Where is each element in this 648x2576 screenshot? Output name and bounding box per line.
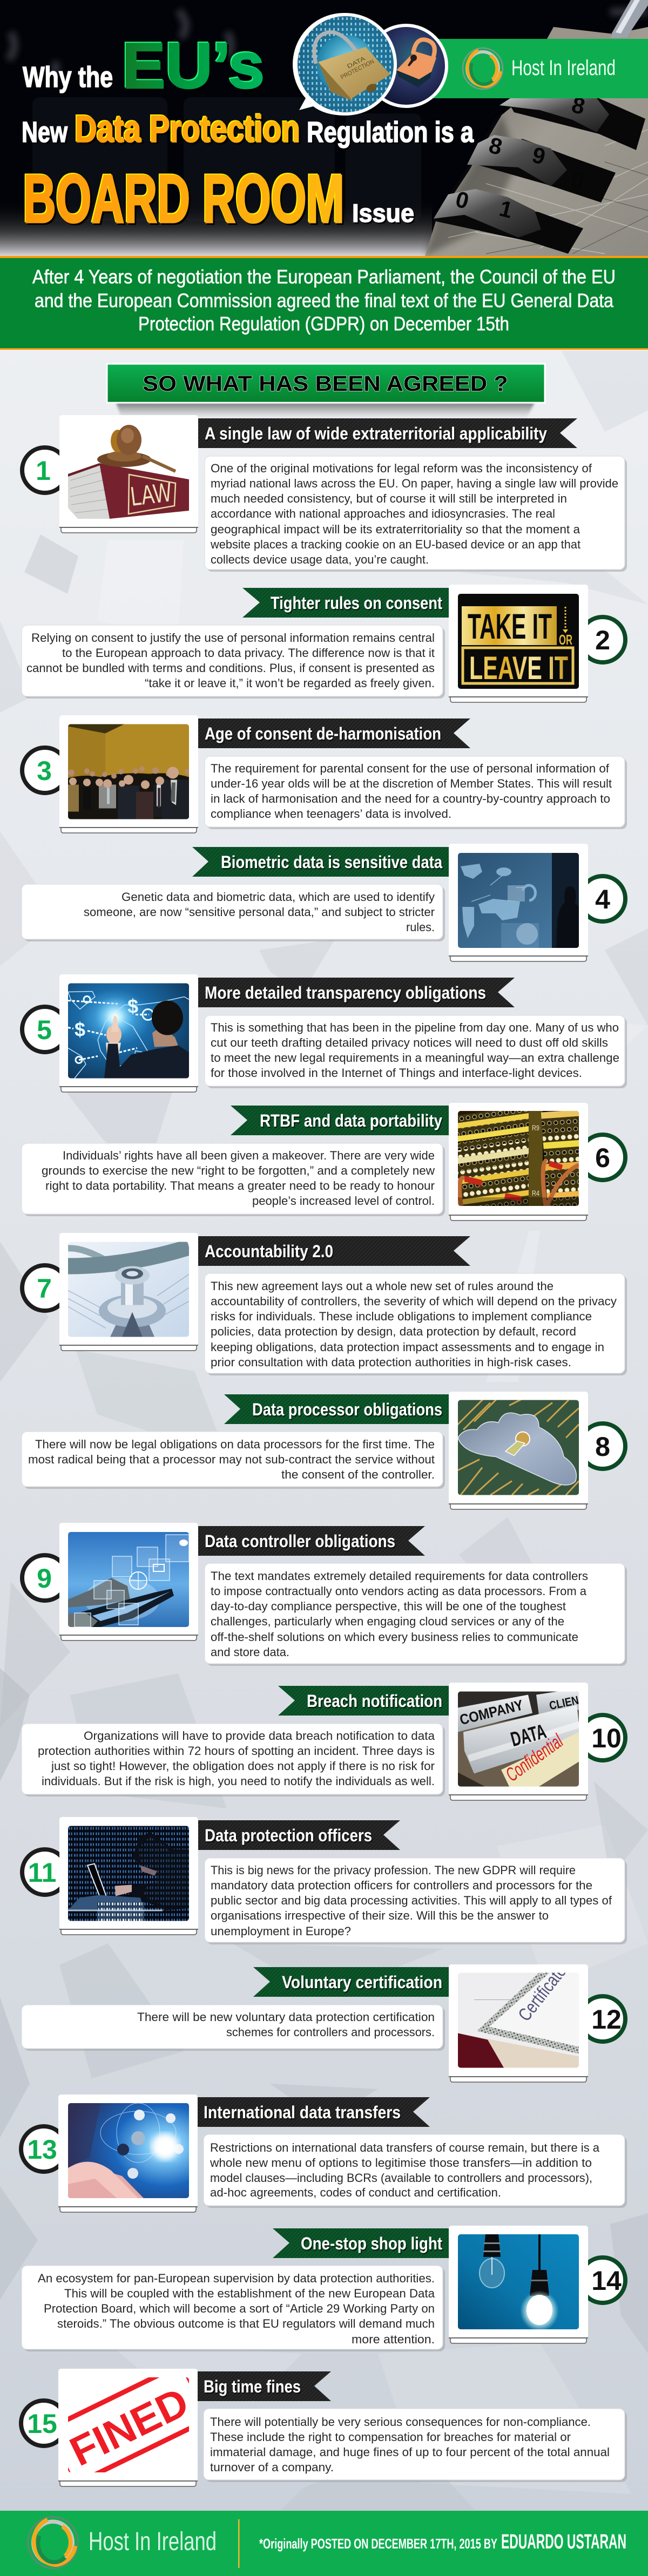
number badge 6 — [580, 1135, 625, 1180]
photo card: fined stamp: FINED — [63, 2379, 195, 2475]
text block: cut our teeth drafting detailed privacy notices will need to dust off old skills — [211, 1036, 608, 1049]
panel: item 7 accountability — [22, 1233, 627, 1375]
text block: Individuals’ rights have all been given a makeover. There are very wide — [63, 1149, 435, 1162]
logo: Host In Ireland — [463, 48, 503, 89]
text block: rules. — [406, 920, 435, 934]
number badge 6: 6 — [595, 1143, 610, 1173]
text block: Protection Board, which will become a sort of “Article 29 Working Party on — [44, 2302, 435, 2315]
ribbon heading — [198, 2097, 430, 2127]
panel: item 10 breach notification — [22, 1683, 625, 1800]
text block: One of the original motivations for legal reform was the inconsistency of — [211, 462, 592, 475]
icon: data protection padlock bubble: PROTECTION — [340, 58, 375, 81]
text block: to the European approach to data privacy. The difference now is that it — [62, 646, 435, 660]
text block — [22, 884, 445, 941]
text block — [205, 1015, 627, 1088]
photo card: light bulbs — [449, 2226, 588, 2343]
ribbon heading: More detailed transparency obligations — [205, 983, 486, 1002]
number badge 14: 14 — [591, 2266, 622, 2296]
number badge 9 — [22, 1555, 68, 1601]
intro band: Protection Regulation (GDPR) on December 15th — [138, 313, 509, 335]
text block — [205, 756, 627, 829]
text block: collects device usage data, you’re caught. — [211, 553, 429, 566]
text block: steroids.” The obvious outcome is that EU regulators will demand much — [57, 2317, 435, 2330]
text block — [22, 1143, 445, 1216]
panel: item 3 age of consent — [22, 715, 627, 833]
panel: item 8 data processor — [22, 1392, 625, 1509]
ribbon heading: Age of consent de-harmonisation — [205, 724, 441, 743]
photo card: confidential data folders — [449, 1683, 588, 1800]
number badge 3: 3 — [37, 756, 52, 786]
text block: Restrictions on international data transfers of course remain, but there is a — [210, 2141, 600, 2154]
ribbon heading: RTBF and data portability — [260, 1111, 442, 1130]
number badge 14 — [580, 2258, 625, 2303]
ribbon heading — [198, 418, 577, 448]
text block: prior consultation with data protection authorities in high-risk cases. — [211, 1355, 571, 1369]
photo card: take it or leave it: LEAVE IT — [469, 650, 568, 686]
text block: Genetic data and biometric data, which are used to identify — [122, 890, 435, 904]
ribbon heading: Breach notification — [307, 1691, 442, 1711]
ribbon heading — [231, 1106, 449, 1135]
text block: public sector and big data processing activities. This will apply to all types of — [211, 1894, 612, 1907]
photo card: hooded hacker with laptop — [59, 1817, 198, 1935]
ribbon heading — [278, 1686, 449, 1716]
text block — [22, 2005, 445, 2051]
panel: item 11 data protection officers — [22, 1817, 627, 1944]
header photo: keyboard and combination padlock: 0 — [569, 166, 587, 194]
text block — [22, 1724, 445, 1797]
text block: just so tight! However, the obligation does not apply if there is no risk for — [51, 1759, 435, 1773]
ribbon heading — [198, 978, 515, 1007]
text block: risks for individuals. These include obligations to implement compliance — [211, 1310, 592, 1323]
photo card: man touching glowing world map: $ — [127, 995, 138, 1017]
text block: accountability of controllers, the severity of which will depend on the privacy — [211, 1294, 617, 1308]
panel: item 9 data controller — [22, 1523, 627, 1666]
panel: item 5 transparency — [22, 974, 627, 1092]
text block: grounds to exercise the new “right to be forgotten,” and a completely new — [42, 1164, 435, 1177]
number badge 7: 7 — [37, 1273, 52, 1304]
header photo: keyboard and combination padlock: 9 — [530, 142, 548, 170]
text block: website places a tracking cookie on an EU-based device or an app that — [210, 538, 580, 551]
text block: in lack of harmonisation and the need for a country-by-country approach to — [211, 792, 610, 805]
ribbon heading — [224, 1394, 449, 1424]
text block: people’s increased level of control. — [252, 1194, 435, 1208]
number badge 2: 2 — [595, 625, 610, 655]
text block: mandatory data protection officers for controllers and processors for the — [211, 1879, 592, 1892]
number badge 15: 15 — [27, 2409, 57, 2439]
text block: organisations irrespective of their size. Will this be the answer to — [211, 1909, 549, 1922]
footer brand name: Host In Ireland — [89, 2527, 217, 2556]
text block: There will now be legal obligations on data processors for the first time. The — [35, 1438, 435, 1451]
panel: item 2 consent — [22, 585, 625, 702]
panel: item 15 big time fines — [21, 2364, 627, 2486]
photo card: patch panel: R4 — [532, 1189, 539, 1197]
text block: These include the right to compensation for breaches for material or — [210, 2430, 571, 2444]
text block — [22, 2266, 445, 2351]
photo card: group of delegates — [59, 715, 198, 833]
photo card: man touching glowing world map — [59, 974, 198, 1092]
ribbon heading — [198, 1820, 400, 1850]
text block: accordance with national approaches and idiosyncrasies. The real — [211, 507, 555, 520]
text block: and store data. — [211, 1645, 289, 1659]
panel: item 14 one-stop shop — [22, 2226, 625, 2351]
text block — [22, 625, 445, 699]
text block: “take it or leave it,” it won’t be regarded as freely given. — [145, 676, 435, 690]
text block: This is big news for the privacy profession. The new GDPR will require — [211, 1863, 576, 1877]
text block: the consent of the controller. — [281, 1468, 435, 1481]
number badge 4: 4 — [595, 884, 610, 914]
number badge 8: 8 — [595, 1432, 610, 1462]
number badge 15 — [21, 2401, 66, 2446]
text block: unemployment in Europe? — [211, 1924, 351, 1938]
text block: An ecosystem for pan-European supervision by data protection authorities. — [38, 2272, 435, 2285]
title: Issue — [352, 199, 414, 227]
text block — [205, 1563, 627, 1666]
text block: policies, data protection by design, data protection by default, record — [211, 1325, 576, 1338]
credit line: *Originally POSTED ON DECEMBER 17TH, 2015 BY — [259, 2536, 497, 2552]
header photo: keyboard and combination padlock: 8 — [487, 132, 505, 160]
photo card: confidential data folders: CLIEN — [548, 1693, 580, 1712]
text block — [205, 1858, 627, 1944]
panel: item 1 single law — [22, 415, 627, 572]
photo card: take it or leave it: OR — [559, 632, 572, 648]
ribbon heading: Data processor obligations — [252, 1400, 442, 1419]
footer logo — [28, 2517, 78, 2568]
title: Data Protection — [75, 108, 300, 150]
credit line — [259, 2531, 626, 2553]
photo card: law book and gavel: LAW — [129, 477, 173, 512]
number badge 12: 12 — [591, 2004, 622, 2035]
number badge 5 — [22, 1007, 68, 1052]
ribbon heading — [198, 1526, 425, 1556]
photo card: take it or leave it: TAKE IT — [468, 606, 552, 646]
ribbon heading: Big time fines — [204, 2377, 301, 2396]
text block — [204, 2134, 627, 2208]
number badge 1 — [22, 448, 68, 493]
number badge 11 — [22, 1849, 68, 1895]
number badge 3 — [22, 748, 68, 793]
intro band — [0, 256, 648, 350]
brand name: Host In Ireland — [511, 56, 616, 80]
text block: whole new menu of options to legitimise those transfers—in addition to — [210, 2156, 592, 2170]
icon: data protection padlock bubble: DATA — [346, 55, 367, 70]
panel: item 13 international data transfers — [21, 2094, 627, 2212]
text block: right to data portability. That means a greater need to be ready to honour — [45, 1179, 435, 1192]
heading: so what has been agreed — [107, 364, 545, 418]
text block: This will be coupled with the establishment of the new European Data — [64, 2287, 435, 2300]
ribbon heading — [253, 1967, 449, 1997]
ribbon heading: A single law of wide extraterritorial applicability — [205, 424, 547, 443]
ribbon heading — [192, 847, 449, 877]
title — [22, 30, 474, 237]
ribbon heading — [198, 2371, 331, 2401]
header green strip — [432, 39, 648, 98]
text block: cannot be bundled with terms and conditions. Plus, if consent is presented as — [26, 661, 435, 675]
text block: The requirement for parental consent for the use of personal information of — [211, 762, 610, 775]
icon: data protection padlock bubble — [293, 13, 397, 116]
photo card: cloud with keyhole on circuit board — [449, 1392, 588, 1509]
photo card: tablet with floating icons — [59, 1523, 198, 1640]
icon: small padlock bubble — [382, 24, 448, 108]
number badge 1: 1 — [36, 456, 51, 486]
text block: model clauses—including BCRs (available to controllers and processors), — [210, 2171, 592, 2185]
photo card: confidential data folders: COMPANY — [458, 1697, 525, 1728]
footer — [0, 2511, 648, 2576]
heading: so what has been agreed: SO WHAT HAS BEEN AGREED ? — [143, 372, 508, 396]
text block: protection authorities within 72 hours of spotting an incident. Three days is — [38, 1744, 435, 1758]
text block — [204, 2409, 627, 2482]
ribbon heading: Data controller obligations — [205, 1531, 395, 1551]
header photo: keyboard and combination padlock: 1 — [497, 195, 515, 223]
panel: item 6 RTBF — [22, 1103, 625, 1221]
text block: Relying on consent to justify the use of personal information remains central — [31, 631, 435, 645]
text block: The text mandates extremely detailed requirements for data controllers — [211, 1569, 588, 1583]
ribbon heading: One-stop shop light — [301, 2234, 442, 2253]
ribbon heading — [198, 1236, 470, 1266]
text block: immaterial damage, and huge fines of up to four percent of the total annual — [210, 2445, 610, 2459]
number badge 10: 10 — [591, 1723, 622, 1753]
panel: item 12 voluntary certification — [22, 1961, 625, 2082]
number badge 13: 13 — [27, 2134, 57, 2165]
panel: item 4 biometric data — [22, 844, 625, 961]
text block: day-to-day compliance perspective, this will be one of the toughest — [211, 1599, 566, 1613]
number badge 10 — [580, 1715, 625, 1760]
number badge 5: 5 — [37, 1015, 52, 1045]
text block — [205, 456, 627, 572]
number badge 12 — [580, 1996, 625, 2042]
ribbon heading: Biometric data is sensitive data — [221, 852, 442, 872]
header photo: keyboard and combination padlock — [0, 0, 648, 256]
text block: turnover of a company. — [210, 2460, 334, 2474]
text block: off-the-shelf solutions on which every business relies to communicate — [211, 1630, 578, 1644]
photo card: certificate with seal — [449, 1961, 588, 2082]
text block: compliance when teenagers’ data is involved. — [211, 807, 451, 821]
number badge 8 — [580, 1423, 625, 1469]
title: EU’s — [122, 30, 265, 102]
header photo: keyboard and combination padlock: 0 — [453, 186, 471, 214]
text block: This is something that has been in the pipeline from day one. Many of us who — [211, 1021, 619, 1034]
ribbon heading — [273, 2228, 449, 2258]
title: Why the — [23, 61, 113, 93]
text block: much needed consistency, but of course it will still be interpreted in — [211, 492, 567, 505]
ribbon heading: Accountability 2.0 — [205, 1242, 333, 1261]
photo card: confidential data folders: Confidential — [502, 1730, 567, 1786]
photo card: confidential data folders: DATA — [508, 1720, 549, 1751]
photo card: take it or leave it — [449, 585, 588, 702]
text block — [205, 1273, 627, 1375]
number badge 9: 9 — [37, 1563, 52, 1594]
text block: ad-hoc agreements, codes of conduct and certification. — [210, 2186, 501, 2199]
text block: more attention. — [352, 2333, 435, 2346]
ribbon heading: International data transfers — [204, 2103, 401, 2122]
text block: to impose contractually onto vendors acting as data processors. From a — [211, 1584, 587, 1598]
header banner — [0, 0, 648, 256]
photo card: fined stamp — [47, 2364, 209, 2486]
text block: keeping obligations, data protection impact assessments and to engage in — [211, 1340, 604, 1354]
ribbon heading: Data protection officers — [205, 1826, 372, 1845]
text block: schemes for controllers and processors. — [226, 2025, 435, 2039]
ribbon heading — [242, 588, 449, 618]
photo card: digital world map and man — [449, 844, 588, 961]
text block: to meet the new legal requirements in a meaningful way—an extra challenge — [211, 1051, 619, 1065]
title: BOARD ROOM — [23, 161, 345, 237]
text block: Organizations will have to provide data breach notification to data — [84, 1729, 435, 1743]
photo card: man touching glowing world map: $ — [75, 1018, 85, 1041]
title: Regulation is a — [307, 116, 474, 148]
text block: someone, are now “sensitive personal data,” and subject to stricter — [84, 905, 435, 919]
number badge 2 — [580, 617, 625, 662]
photo card: hand and globe network — [58, 2094, 198, 2212]
photo card: patch panel — [441, 1103, 588, 1221]
text block: myriad national laws across the EU. On paper, having a single law will provide — [211, 477, 618, 490]
number badge 4 — [580, 876, 625, 921]
header photo: keyboard and combination padlock: 8 — [569, 92, 588, 119]
number badge 11: 11 — [28, 1858, 56, 1888]
text block: most radical being that a processor may not sub-contract the service without — [28, 1453, 435, 1466]
text block: under-16 year olds will be at the discretion of Member States. This will result — [211, 777, 612, 790]
text block: challenges, particularly when engaging cloud services or any of the — [211, 1615, 564, 1628]
text block: for those involved in the Internet of Things and interface-light devices. — [211, 1066, 582, 1080]
number badge 7 — [22, 1265, 68, 1311]
ribbon heading — [198, 718, 470, 748]
ribbon heading: Tighter rules on consent — [271, 593, 442, 613]
text block: individuals. But if the risk is high, you need to notify the individuals as well. — [42, 1774, 435, 1788]
text block: There will potentially be very serious consequences for non-compliance. — [210, 2415, 591, 2429]
ribbon heading: Voluntary certification — [282, 1972, 442, 1992]
text block: There will be new voluntary data protection certification — [137, 2010, 435, 2024]
photo card: patch panel: R9 — [532, 1123, 539, 1132]
text block — [22, 1432, 445, 1489]
number badge 13 — [21, 2126, 66, 2172]
photo card: certificate with seal: Certificate — [514, 1961, 570, 2025]
text block: This new agreement lays out a whole new set of rules around the — [211, 1279, 554, 1293]
photo card: law book and gavel — [59, 415, 198, 533]
photo card: stethoscope on book — [59, 1233, 198, 1351]
text block: geographical impact will be its extraterritoriality so that the moment a — [211, 523, 580, 536]
title: New — [22, 116, 68, 148]
